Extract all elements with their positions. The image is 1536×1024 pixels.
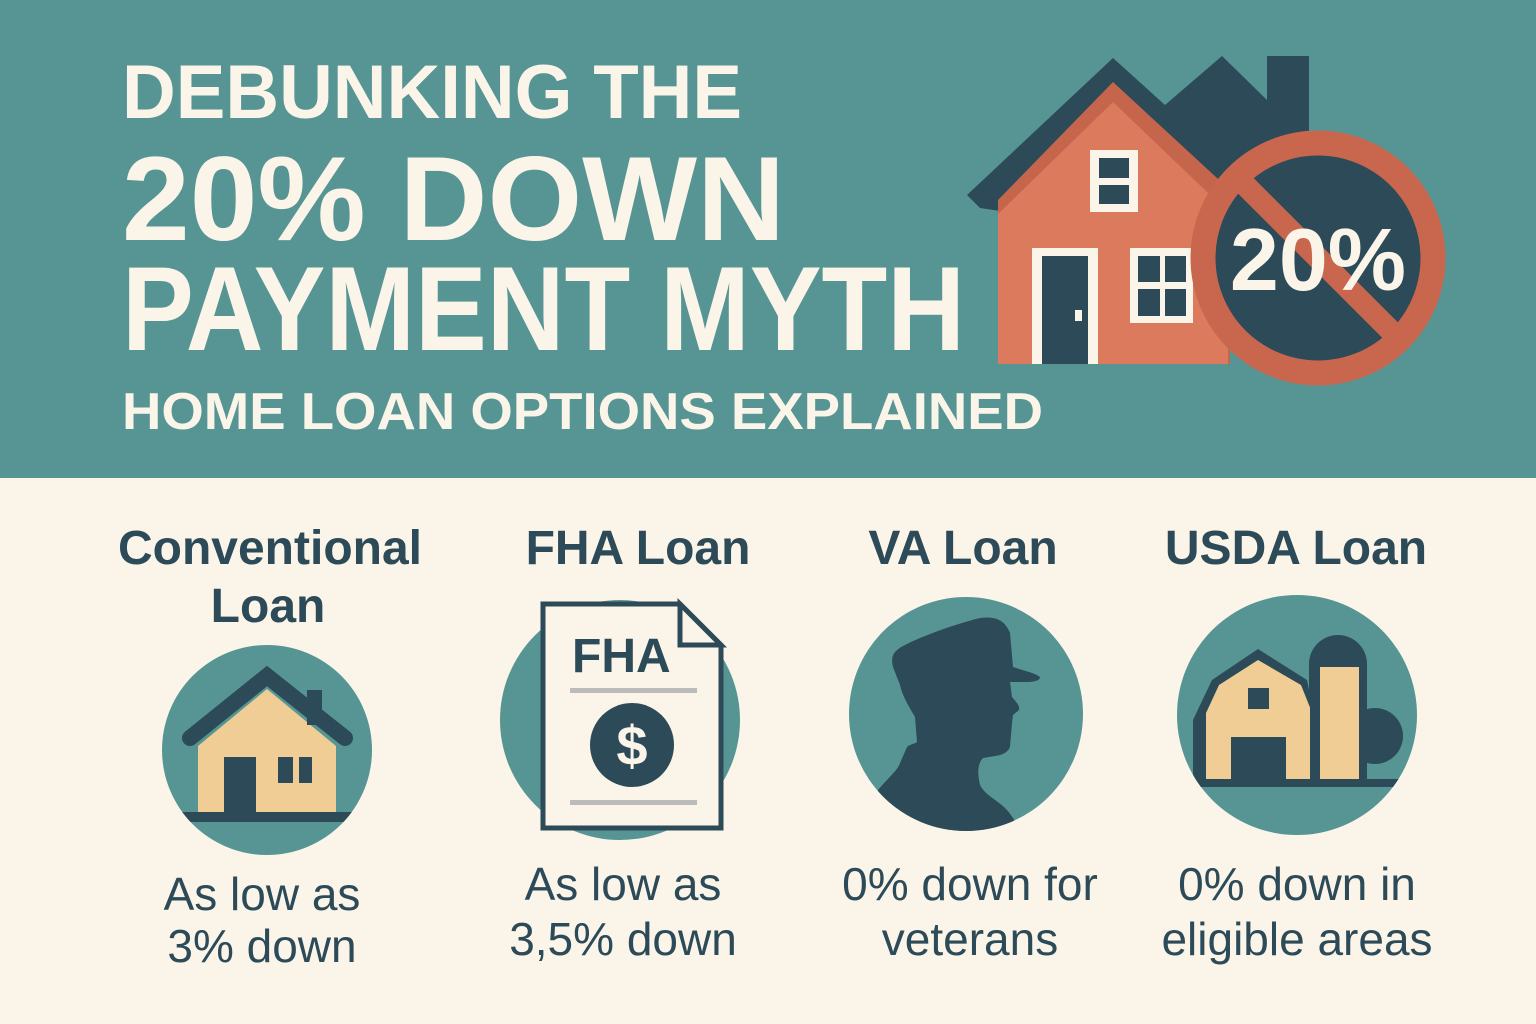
icon: barn and silo [1170, 595, 1430, 835]
column: FHA [500, 522, 750, 965]
column: VA: 0% down for [842, 858, 1098, 910]
title [122, 50, 965, 376]
icon: house with no 20%: 20% [1230, 210, 1406, 309]
column: VA [842, 522, 1098, 965]
title: PAYMENT MYTH [122, 242, 965, 376]
title: DEBUNKING THE [122, 50, 742, 135]
icon: house with no 20% [967, 56, 1433, 373]
column: USDA: USDA Loan [1165, 522, 1427, 575]
column: VA: VA Loan [868, 522, 1058, 575]
column: conventional [118, 522, 422, 972]
column: conventional: 3% down [167, 920, 357, 972]
column: FHA: As low as [525, 858, 721, 910]
subtitle: HOME LOAN OPTIONS EXPLAINED [122, 383, 1043, 441]
title: 20% DOWN [122, 132, 785, 266]
column: USDA: eligible areas [1161, 913, 1433, 965]
column: conventional: As low as [164, 868, 360, 920]
icon: veteran silhouette [849, 597, 1083, 850]
icon: FHA document [500, 600, 740, 840]
header band [0, 0, 1536, 478]
icon: FHA document: $ [616, 714, 648, 777]
column: conventional: Loan [211, 580, 325, 633]
column: FHA: 3,5% down [509, 913, 737, 965]
column: conventional: Conventional [118, 522, 422, 575]
column: FHA: FHA Loan [526, 522, 750, 575]
column: USDA [1161, 522, 1433, 965]
column: USDA: 0% down in [1178, 858, 1416, 910]
icon: house [160, 645, 380, 855]
column: VA: veterans [882, 913, 1058, 965]
icon: FHA document: FHA [572, 630, 671, 683]
